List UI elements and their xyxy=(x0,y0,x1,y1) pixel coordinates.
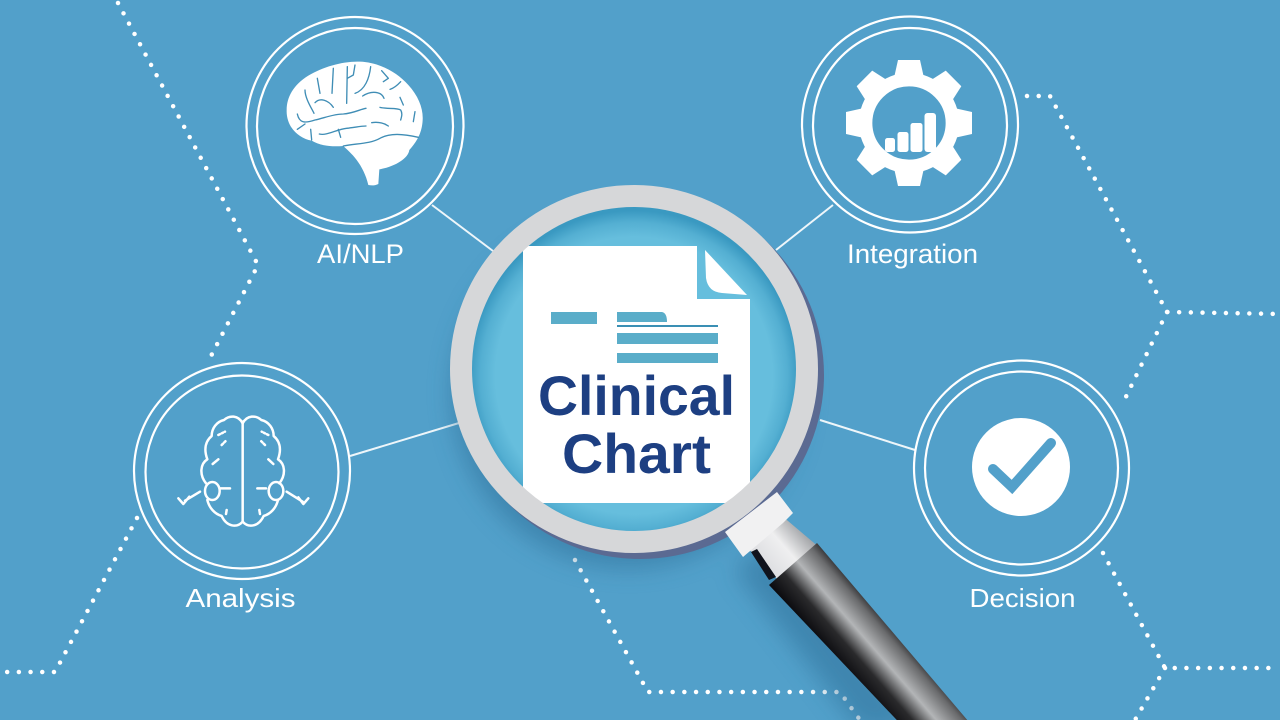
title: Clinical Chart: Clinical xyxy=(538,364,735,427)
label: Integration: Integration xyxy=(847,239,978,269)
handle: dark seam xyxy=(751,549,776,580)
node: AI/NLP xyxy=(246,17,464,269)
label: AI/NLP: AI/NLP xyxy=(317,239,404,269)
icon: gear with bars xyxy=(846,60,972,186)
icon: check mark badge xyxy=(972,418,1070,516)
Decision rings xyxy=(914,360,1129,576)
page fold xyxy=(705,250,747,295)
handle: neck xyxy=(745,510,820,582)
magnifier ring xyxy=(461,196,807,542)
node: Analysis xyxy=(134,363,350,613)
label: Analysis: Analysis xyxy=(186,583,296,613)
title: Clinical Chart: Chart xyxy=(562,422,711,485)
Analysis rings xyxy=(134,363,350,579)
lens xyxy=(469,204,799,534)
page xyxy=(523,246,750,503)
Integration rings xyxy=(802,16,1018,232)
document text bars xyxy=(551,312,718,363)
ring shadow xyxy=(456,191,824,559)
connector lines xyxy=(350,205,915,456)
title: Clinical Chart xyxy=(538,364,735,485)
handle: collar xyxy=(725,492,793,557)
handle: grip xyxy=(769,543,980,720)
magnifier drop shadow xyxy=(452,216,925,720)
icon: solid brain xyxy=(287,62,423,185)
icon: outline brain xyxy=(178,417,308,526)
document xyxy=(523,246,750,503)
node: Decision xyxy=(914,360,1129,613)
label: Decision: Decision xyxy=(970,583,1076,613)
magnifying glass xyxy=(452,191,980,720)
AI/NLP rings xyxy=(246,17,464,234)
node: Integration xyxy=(802,16,1018,269)
